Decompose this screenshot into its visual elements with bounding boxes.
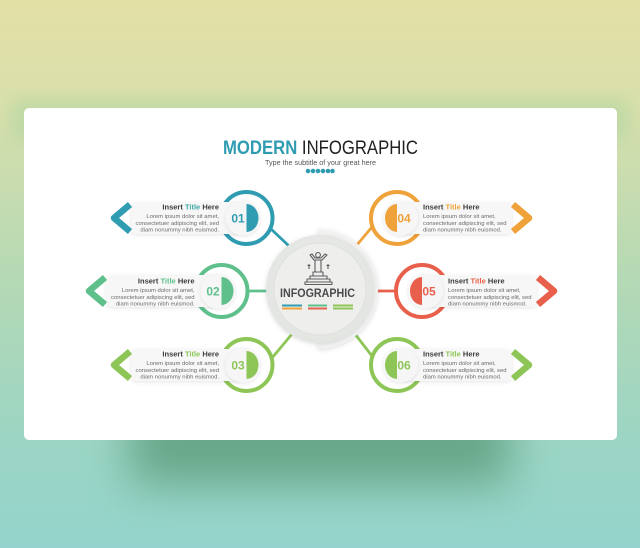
item 02: consectetuer adipiscing elit, sed [111, 295, 194, 301]
item 04 [371, 192, 529, 244]
item 02 [89, 265, 248, 317]
item 05: diam nonummy nibh euismod. [448, 302, 527, 308]
item 05: 05 [422, 284, 436, 298]
item 01: Lorem ipsum dolor sit amet, [146, 214, 219, 220]
dots [306, 169, 335, 173]
item 05: Lorem ipsum dolor sit amet, [448, 288, 521, 294]
item 02: diam nonummy nibh euismod. [116, 302, 195, 308]
item 06: 06 [397, 358, 411, 372]
item 05 [396, 265, 554, 317]
subtitle: Type the subtitle of your great here [265, 160, 376, 167]
item 04: consectetuer adipiscing elit, sed [423, 221, 506, 227]
item 03: diam nonummy nibh euismod. [140, 374, 219, 380]
item 04: Insert Title Here [423, 202, 480, 212]
hub label: INFOGRAPHIC [280, 286, 355, 300]
item 03: consectetuer adipiscing elit, sed [136, 368, 219, 374]
item 03: Insert Title Here [162, 350, 219, 358]
center hub [266, 229, 378, 349]
item 01: 01 [231, 212, 245, 226]
item 06: consectetuer adipiscing elit, sed [423, 368, 506, 374]
white card [24, 108, 617, 440]
card shadow [12, 100, 628, 485]
item 05: Insert Title Here [448, 276, 505, 286]
hub colour bars [282, 304, 353, 310]
item 01: Insert Title Here [162, 202, 219, 212]
item 04: Lorem ipsum dolor sit amet, [423, 214, 496, 220]
title: MODERN INFOGRAPHIC [223, 138, 418, 159]
item 03 [114, 339, 272, 391]
item 05: consectetuer adipiscing elit, sed [448, 295, 532, 301]
icon: statue on podium [305, 253, 332, 284]
item 01: diam nonummy nibh euismod. [140, 228, 219, 234]
item 06: diam nonummy nibh euismod. [423, 374, 502, 380]
item 02: Lorem ipsum dolor sit amet, [122, 288, 195, 294]
item 06 [371, 339, 529, 391]
item 01 [114, 192, 272, 244]
item 04: diam nonummy nibh euismod. [423, 228, 502, 234]
item 06: Insert Title Here [423, 350, 480, 358]
item 02: 02 [206, 284, 220, 298]
item 03: Lorem ipsum dolor sit amet, [146, 361, 219, 367]
item 02: Insert Title Here [138, 276, 194, 286]
item 04: 04 [397, 212, 411, 226]
item 03: 03 [231, 358, 245, 372]
connector lines [246, 227, 397, 358]
item 01: consectetuer adipiscing elit, sed [136, 221, 219, 227]
item 06: Lorem ipsum dolor sit amet, [423, 361, 496, 367]
